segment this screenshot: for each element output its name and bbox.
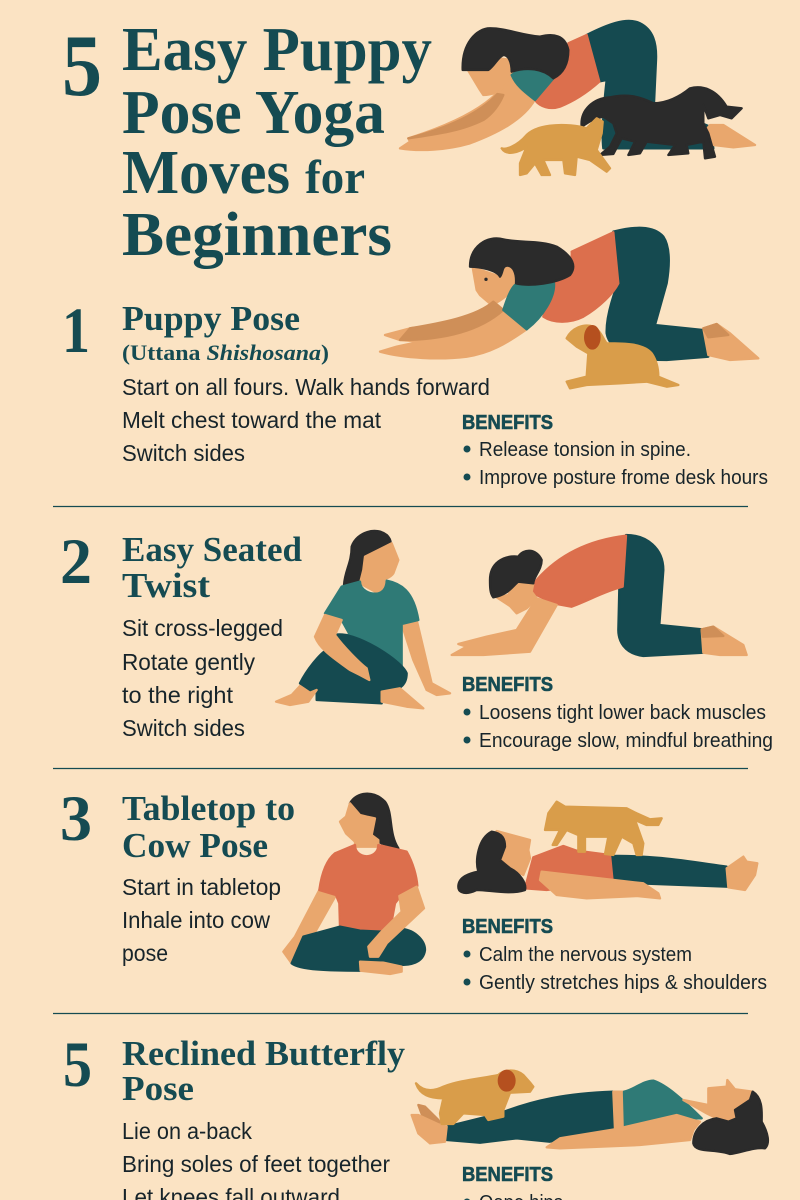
step 1 benefits: Improve posture frome desk hours xyxy=(479,466,768,489)
step 5 instructions: Lie on a-back xyxy=(122,1118,252,1144)
title: 5 xyxy=(62,18,102,115)
step 3 heading: Tabletop to xyxy=(122,789,295,828)
step 5 heading: Pose xyxy=(122,1069,194,1108)
step 3 instructions: pose xyxy=(122,940,168,966)
step 3 instructions xyxy=(122,874,281,966)
illustration: reclined butterfly with puppy xyxy=(412,1070,768,1154)
step 2 heading xyxy=(122,530,303,605)
step 5 instructions: Bring soles of feet together xyxy=(122,1151,390,1177)
step 2 number: 2 xyxy=(60,526,92,598)
illustration: lying woman with dog on top xyxy=(458,802,757,898)
step 2 heading: Twist xyxy=(122,566,210,605)
title xyxy=(62,16,432,269)
step 2 benefits: Loosens tight lower back muscles xyxy=(479,701,766,724)
step 3 benefits: Gently stretches hips & shoulders xyxy=(479,971,767,994)
title: Easy Puppy xyxy=(122,16,432,84)
step 1 heading: Puppy Pose xyxy=(122,299,300,338)
step 1 heading: (Uttana Shishosana ) xyxy=(122,340,329,365)
step 5 benefits: BENEFITS xyxy=(462,1164,553,1186)
step 3 heading: Cow Pose xyxy=(122,826,268,865)
step 1 heading xyxy=(122,299,329,365)
step 5 number: 5 xyxy=(63,1029,92,1101)
illustration: cross-legged sitting woman xyxy=(283,794,425,974)
step 2 instructions: Rotate gently xyxy=(122,649,255,675)
step 2 heading: Easy Seated xyxy=(122,530,303,569)
step 2 instructions: Switch sides xyxy=(122,715,245,741)
illustration: woman in puppy pose with cat and black dog xyxy=(400,21,755,175)
title: Moves for xyxy=(122,139,365,207)
step 1 benefits: BENEFITS xyxy=(462,412,553,434)
step 3 benefits: Calm the nervous system xyxy=(479,943,692,966)
step 3 number: 3 xyxy=(60,783,92,855)
step 3 benefits: BENEFITS xyxy=(462,916,553,938)
step 2 instructions: to the right xyxy=(122,682,234,708)
step 1 benefits xyxy=(462,412,768,489)
step 2 instructions xyxy=(122,615,283,741)
title: Pose Yoga xyxy=(122,79,385,147)
step 1 instructions: Melt chest toward the mat xyxy=(122,407,382,433)
step 5 heading: Reclined Butterfly xyxy=(122,1034,406,1073)
step 2 benefits: BENEFITS xyxy=(462,674,553,696)
step 1 instructions: Switch sides xyxy=(122,440,245,466)
step 3 heading xyxy=(122,789,295,865)
step 3 instructions: Start in tabletop xyxy=(122,874,281,900)
step 1 instructions: Start on all fours. Walk hands forward xyxy=(122,374,490,400)
step 2 benefits xyxy=(462,674,773,752)
title: Beginners xyxy=(122,201,392,269)
illustration: woman in puppy pose with puppy xyxy=(380,228,758,388)
step 1 instructions xyxy=(122,374,490,466)
step 5 instructions xyxy=(122,1118,390,1200)
illustration: tabletop pose xyxy=(452,535,747,656)
step 2 instructions: Sit cross-legged xyxy=(122,615,283,641)
step 5 benefits xyxy=(462,1164,563,1200)
step 2 benefits: Encourage slow, mindful breathing xyxy=(479,729,773,752)
step 3 benefits xyxy=(462,916,767,994)
step 5 heading xyxy=(122,1034,406,1108)
step 3 instructions: Inhale into cow xyxy=(122,907,270,933)
illustration: seated twist xyxy=(276,531,450,708)
step 1 benefits: Release tonsion in spine. xyxy=(479,438,691,461)
step 1 number: 1 xyxy=(62,295,90,367)
